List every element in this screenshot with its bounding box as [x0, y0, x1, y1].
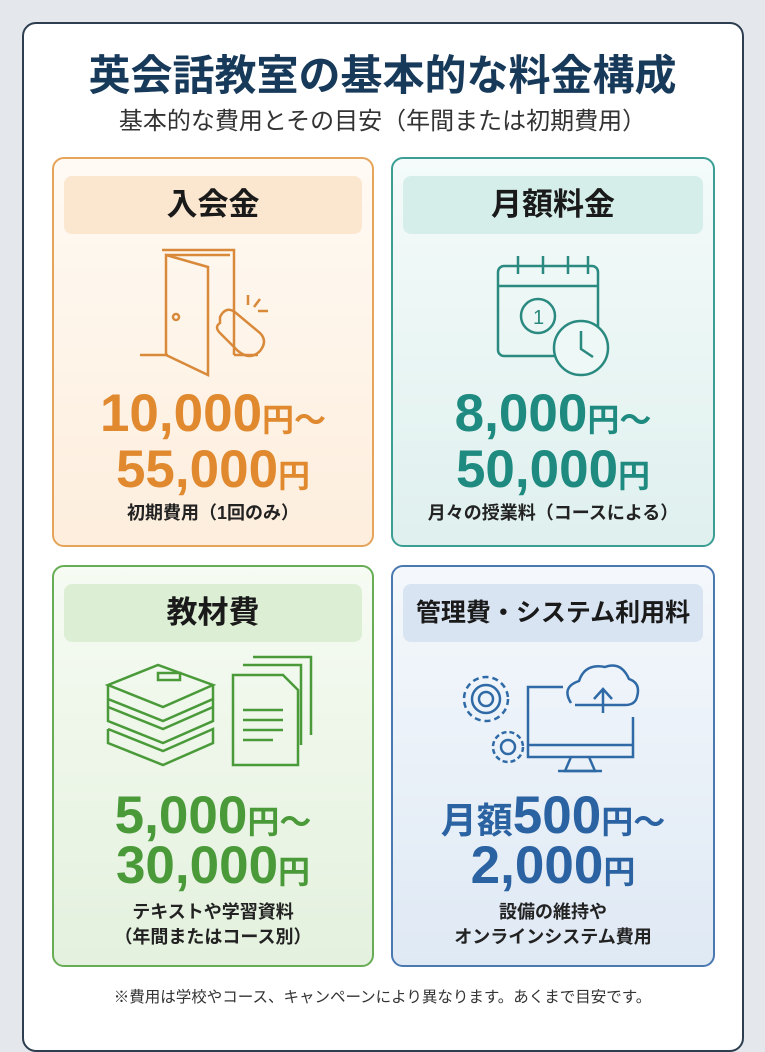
caption: materials	[114, 902, 312, 947]
icon: calendar and clock: 1	[533, 307, 544, 329]
heading: admin fee	[403, 584, 703, 642]
price: admin fee line 1: 月額500円〜	[441, 786, 665, 845]
icon: books and papers	[104, 656, 312, 766]
footnote: ※費用は学校やコース、キャンペーンにより異なります。あくまで目安です。	[114, 989, 651, 1006]
heading: materials: 教材費	[166, 595, 260, 630]
panel: admin/system fee	[391, 565, 715, 967]
title: 英会話教室の基本的な料金構成	[88, 52, 676, 99]
heading: materials	[64, 584, 362, 642]
price: admin fee line 2: 2,000円	[471, 836, 635, 895]
caption: admin fee: オンラインシステム費用	[454, 927, 652, 947]
caption: admin fee: 設備の維持や	[499, 902, 607, 922]
caption: entry fee: 初期費用（1回のみ）	[127, 503, 299, 523]
caption: materials: （年間またはコース別）	[114, 927, 312, 947]
price: materials line 1: 5,000円〜	[115, 786, 311, 845]
price: materials line 2: 30,000円	[116, 836, 310, 895]
heading: monthly fee: 月額料金	[491, 187, 615, 222]
heading: entry fee: 入会金	[166, 187, 260, 222]
subtitle: 基本的な費用とその目安（年間または初期費用）	[119, 108, 646, 135]
heading: admin fee: 管理費・システム利用料	[416, 599, 690, 627]
price: monthly fee line 1: 8,000円〜	[455, 384, 651, 443]
heading: monthly fee	[403, 176, 703, 234]
panel: monthly fee	[391, 157, 715, 547]
panel: entry fee	[52, 157, 374, 547]
icon: calendar and clock	[496, 256, 610, 376]
icon: door and hand	[140, 248, 268, 377]
caption: admin fee	[454, 902, 652, 947]
heading: entry fee	[64, 176, 362, 234]
icon: gears, monitor, cloud	[462, 664, 640, 772]
price: entry fee line 2: 55,000円	[116, 440, 310, 499]
panel: materials	[52, 565, 374, 967]
caption: monthly fee: 月々の授業料（コースによる）	[428, 503, 678, 523]
caption: materials: テキストや学習資料	[132, 902, 294, 922]
price: monthly fee line 2: 50,000円	[456, 440, 650, 499]
price: entry fee line 1: 10,000円〜	[100, 384, 326, 443]
